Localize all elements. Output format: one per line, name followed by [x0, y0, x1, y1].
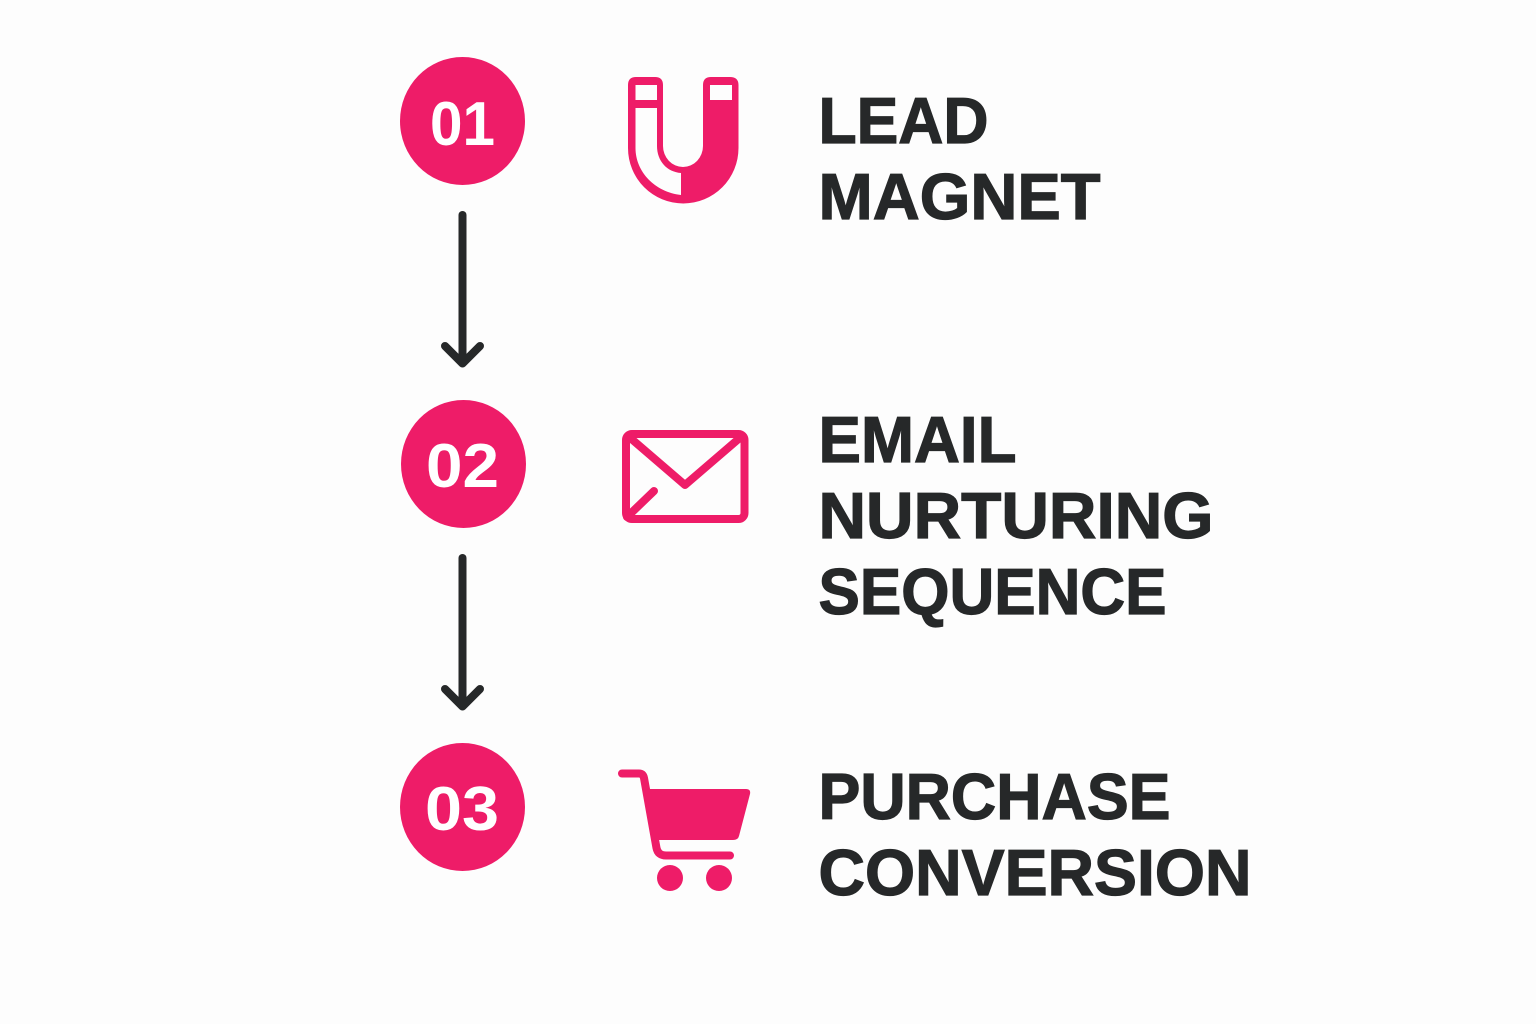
label: email nurturing sequence: SEQUENCE [818, 555, 1166, 628]
label: lead magnet: MAGNET [818, 160, 1100, 233]
icon: magnet [628, 77, 738, 204]
step 02 number badge: 02 [426, 432, 499, 501]
label: purchase conversion [818, 760, 1252, 909]
label: purchase conversion: CONVERSION [818, 836, 1252, 909]
icon: shopping cart [622, 774, 750, 891]
step 01 number badge [400, 57, 525, 185]
label: purchase conversion: PURCHASE [818, 760, 1170, 833]
label: lead magnet: LEAD [818, 84, 988, 157]
label: email nurturing sequence: NURTURING [818, 479, 1214, 552]
label: email nurturing sequence [818, 403, 1214, 628]
step 01 number badge: 01 [430, 90, 495, 159]
step 03 number badge [400, 743, 525, 871]
label: email nurturing sequence: EMAIL [818, 403, 1016, 476]
label: lead magnet [818, 84, 1100, 233]
arrow from step 02 to step 03 [445, 558, 480, 706]
icon: envelope [626, 434, 744, 519]
step 02 number badge [401, 400, 526, 528]
arrow from step 01 to step 02 [445, 215, 480, 364]
step 03 number badge: 03 [425, 775, 499, 844]
